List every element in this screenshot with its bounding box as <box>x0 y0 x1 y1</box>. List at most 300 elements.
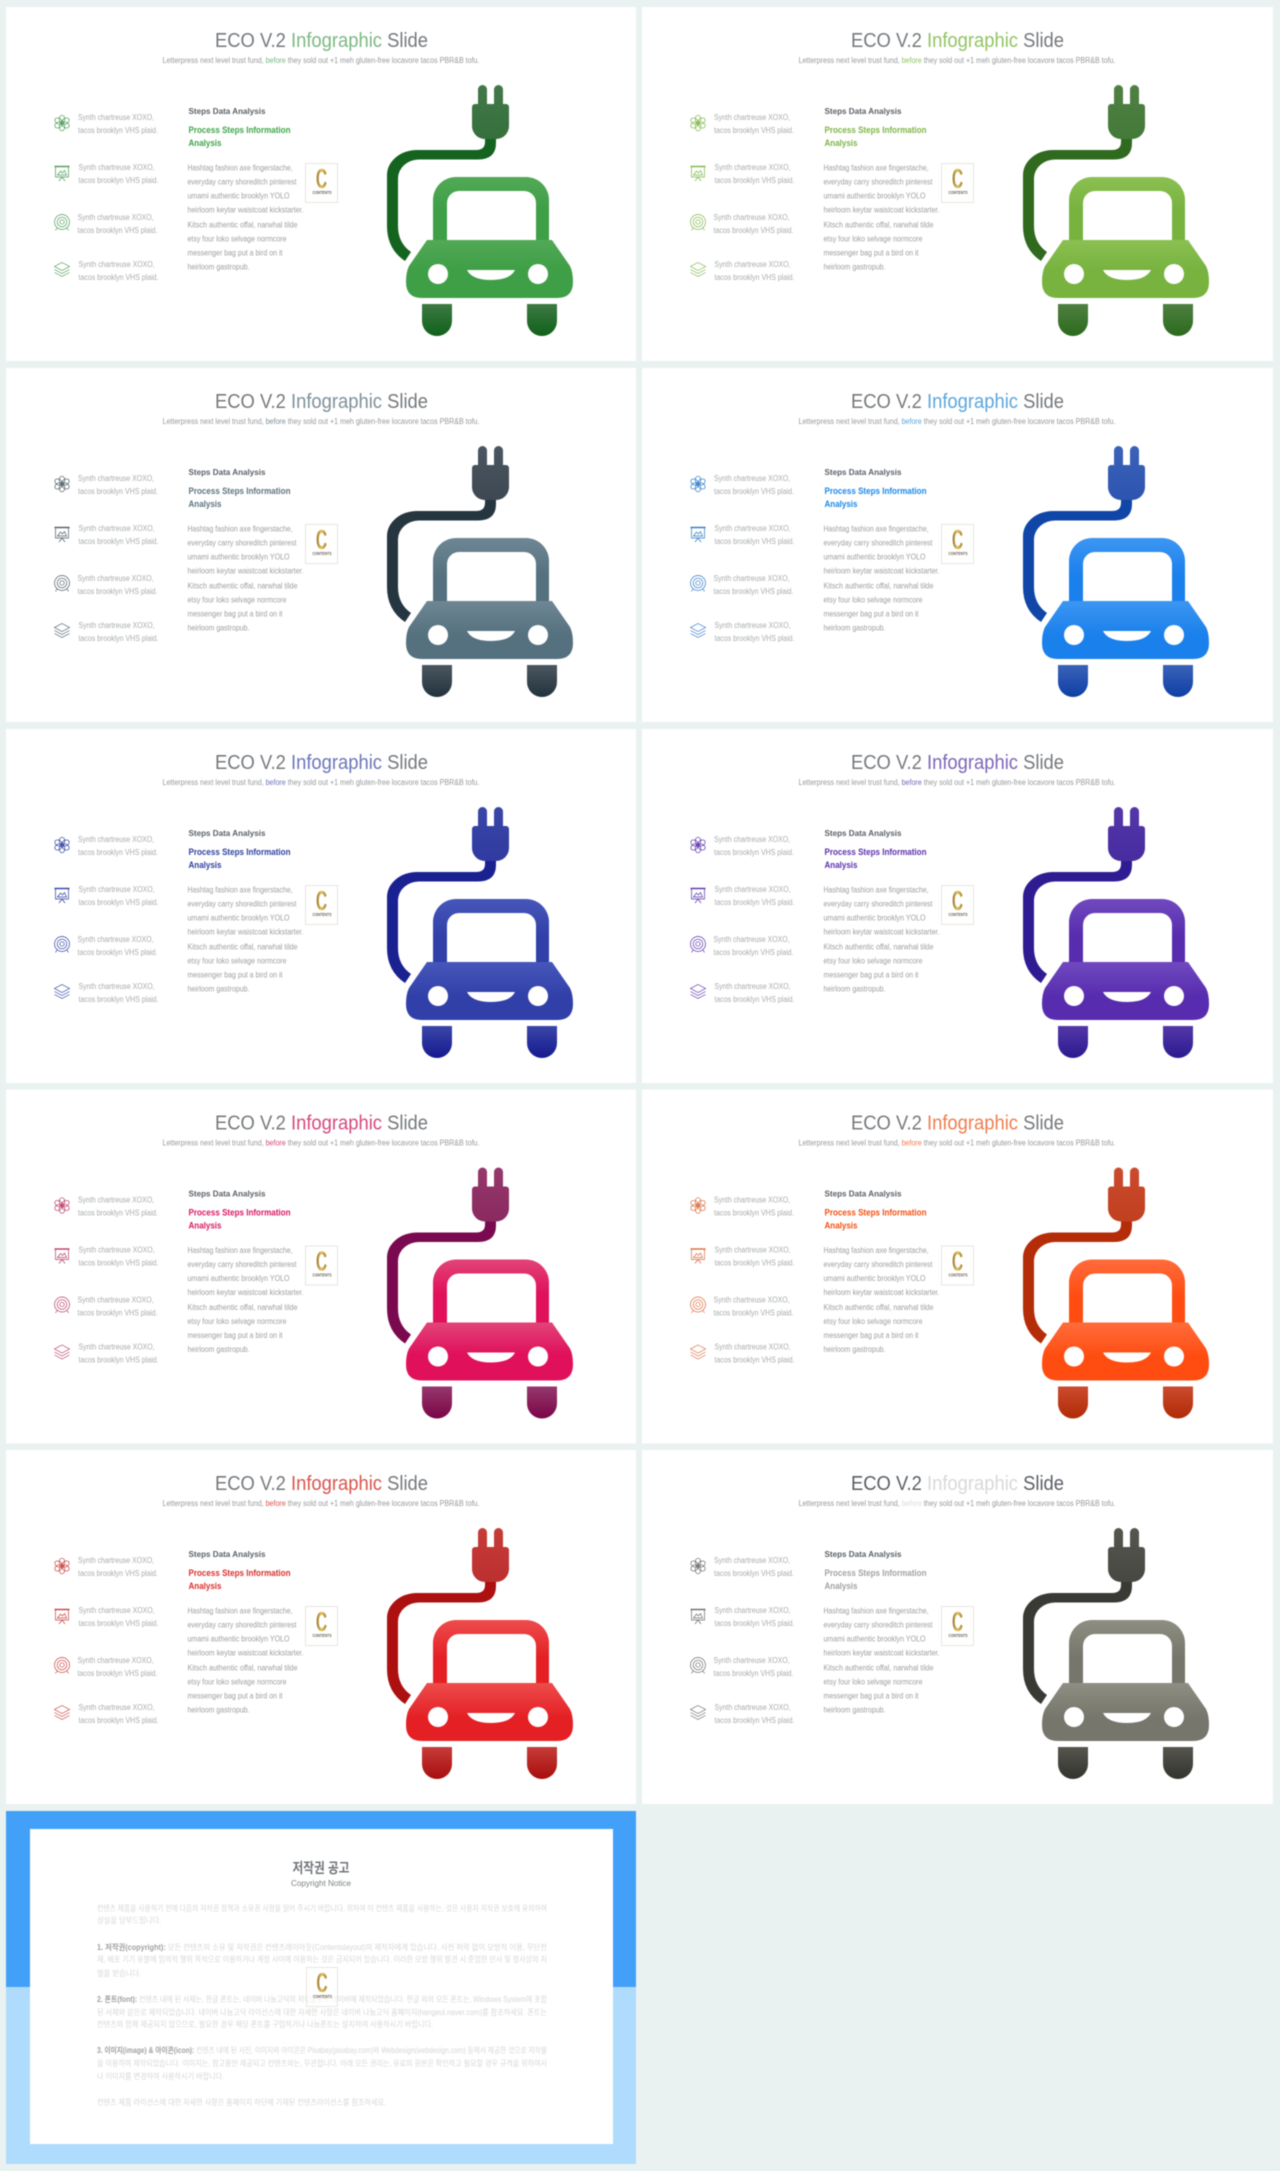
logo: contents <box>942 163 974 202</box>
feature text 3 <box>78 1296 158 1318</box>
body paragraph <box>824 886 940 994</box>
icon: target <box>54 214 70 230</box>
body paragraph: etsy four loko selvage normcore <box>824 1678 923 1686</box>
logo: contents <box>942 1246 974 1285</box>
icon: atom flower <box>54 837 70 853</box>
feature text 3 <box>714 574 794 596</box>
feature text 3: Synth chartreuse XOXO, <box>714 935 790 944</box>
icon: target <box>690 214 706 230</box>
intro text: 컨텐츠 제품을 사용하기 전에 다음의 저작권 정책과 소유권 사항을 읽어 주시기 바랍니다. 위하여 이 컨텐츠 제품을 사용하는, 것은 사용자 저작권 보호에 유의하여 <box>97 1903 547 1913</box>
icon: target <box>54 1658 70 1674</box>
body paragraph: messenger bag put a bird on it <box>188 610 283 618</box>
body paragraph: Hashtag fashion axe fingerstache, <box>188 886 292 894</box>
panel: slide 8 orange <box>642 1090 1273 1444</box>
section 3: image and icon: 을 이용하여 제작되었습니다. 이미지는, 참고용만 제공되고 컨텐츠와는, 무관합니다. 아래 모든 권리는, 유료의 원본은 확인하고 필요할 경우 규격을 위하여서 <box>97 2058 547 2068</box>
feature text 3: Synth chartreuse XOXO, <box>78 1656 154 1665</box>
feature text 4: tacos brooklyn VHS plaid. <box>714 995 794 1004</box>
feature text 4: tacos brooklyn VHS plaid. <box>78 995 158 1004</box>
feature text 2: tacos brooklyn VHS plaid. <box>714 1258 794 1268</box>
feature text 2 <box>714 524 794 546</box>
feature text 1: Synth chartreuse XOXO, <box>78 1556 154 1565</box>
body paragraph: Kitsch authentic offal, narwhal tilde <box>824 1664 934 1672</box>
title: ECO V.2 Infographic Slide <box>215 752 428 774</box>
body paragraph: heirloom keytar waistcoat kickstarter. <box>188 566 304 576</box>
body paragraph: Hashtag fashion axe fingerstache, <box>824 524 928 534</box>
feature text 1 <box>714 1556 794 1578</box>
body paragraph: everyday carry shoreditch pinterest <box>824 1260 933 1269</box>
feature text 1 <box>78 113 158 135</box>
feature text 2: Synth chartreuse XOXO, <box>714 524 790 533</box>
feature text 2: Synth chartreuse XOXO, <box>78 1606 154 1615</box>
body paragraph: heirloom gastropub. <box>188 624 250 632</box>
feature text 2: tacos brooklyn VHS plaid. <box>714 176 794 185</box>
icon: layers <box>54 1706 70 1720</box>
body paragraph: everyday carry shoreditch pinterest <box>824 538 933 548</box>
panel: slide 1 green <box>6 7 636 361</box>
feature text 3: tacos brooklyn VHS plaid. <box>714 1308 794 1318</box>
icon: presentation board <box>690 166 706 181</box>
body paragraph: umami authentic brooklyn YOLO <box>188 192 290 200</box>
body paragraph <box>824 164 940 272</box>
heading: process steps <box>188 1208 290 1230</box>
feature text 3 <box>78 213 158 235</box>
feature text 1 <box>714 835 794 857</box>
body paragraph: Kitsch authentic offal, narwhal tilde <box>188 582 298 590</box>
feature text 3 <box>78 574 158 596</box>
body paragraph: heirloom gastropub. <box>824 262 886 272</box>
body paragraph: Hashtag fashion axe fingerstache, <box>188 1246 292 1255</box>
feature text 4: Synth chartreuse XOXO, <box>714 260 790 269</box>
logo: contents <box>942 885 974 924</box>
feature text 1: Synth chartreuse XOXO, <box>78 474 154 483</box>
panel: slide 10 gray <box>642 1450 1273 1804</box>
subtitle: Letterpress next level trust fund, before they sold out +1 meh gluten-free locavore tacos PBR&B tofu. <box>798 56 1116 65</box>
icon: electric car with plug <box>387 85 573 336</box>
body paragraph <box>188 1246 304 1354</box>
feature text 4: tacos brooklyn VHS plaid. <box>78 1716 158 1725</box>
icon: atom flower <box>54 476 70 492</box>
feature text 1 <box>78 474 158 496</box>
feature text 1: tacos brooklyn VHS plaid. <box>714 1208 794 1218</box>
icon: layers <box>54 262 70 276</box>
title: ECO V.2 Infographic Slide <box>215 1473 428 1495</box>
body paragraph: etsy four loko selvage normcore <box>188 1678 287 1686</box>
icon: target <box>54 1297 70 1313</box>
body paragraph <box>188 1606 304 1714</box>
icon: target <box>690 1658 706 1674</box>
logo: contents: CONTENTS <box>312 190 332 195</box>
heading: process steps: Analysis <box>188 1581 222 1591</box>
heading: process steps <box>824 486 926 509</box>
feature text 3: Synth chartreuse XOXO, <box>714 213 790 222</box>
heading: steps data: Steps Data Analysis <box>824 1549 902 1559</box>
feature text 2: Synth chartreuse XOXO, <box>78 885 154 894</box>
heading: process steps <box>188 486 290 509</box>
feature text 4 <box>78 1342 158 1364</box>
logo: contents: CONTENTS <box>948 1633 968 1638</box>
logo: contents: CONTENTS <box>312 1633 332 1638</box>
feature text 3: tacos brooklyn VHS plaid. <box>78 587 158 596</box>
title: ECO V.2 Infographic Slide <box>215 1112 428 1134</box>
logo: contents <box>306 524 338 564</box>
feature text 3: Synth chartreuse XOXO, <box>714 574 790 583</box>
icon: atom flower <box>690 837 706 853</box>
section 2: font <box>97 1994 548 2029</box>
intro text: 성실을 당부드립니다. <box>97 1915 161 1925</box>
body paragraph: heirloom keytar waistcoat kickstarter. <box>824 206 940 214</box>
subtitle: Letterpress next level trust fund, before they sold out +1 meh gluten-free locavore tacos PBR&B tofu. <box>162 417 480 426</box>
icon: atom flower <box>690 1198 706 1213</box>
body paragraph: Kitsch authentic offal, narwhal tilde <box>188 1664 298 1672</box>
feature text 4: tacos brooklyn VHS plaid. <box>714 273 794 282</box>
title: ECO V.2 Infographic Slide <box>851 30 1064 52</box>
body paragraph: heirloom gastropub. <box>824 984 886 994</box>
feature text 3 <box>714 213 794 235</box>
logo: contents <box>942 1606 974 1646</box>
heading: process steps: Analysis <box>188 499 222 509</box>
icon: layers <box>54 1345 70 1359</box>
feature text 1: tacos brooklyn VHS plaid. <box>714 126 794 135</box>
feature text 3: tacos brooklyn VHS plaid. <box>714 226 794 235</box>
feature text 4: tacos brooklyn VHS plaid. <box>714 634 794 643</box>
icon: presentation board <box>690 528 706 542</box>
panel: copyright notice <box>6 1811 636 2164</box>
body paragraph: messenger bag put a bird on it <box>188 1331 283 1340</box>
icon: target <box>690 576 706 592</box>
panel: slide 9 red <box>6 1450 636 1804</box>
body paragraph: etsy four loko selvage normcore <box>188 234 287 244</box>
feature text 1: Synth chartreuse XOXO, <box>714 835 790 844</box>
body paragraph: messenger bag put a bird on it <box>824 610 919 618</box>
section 2: font: 된 서체와 같은로 제작되었습니다. 네이버 나눔고딕 라이선스에 대한 자세한 사항은 네이버 나눔고딕 홈페이지(hangeul.naver.com)를 참조하세요. 폰트는 <box>97 2007 547 2017</box>
logo: contents: C <box>316 524 327 555</box>
title: ECO V.2 Infographic Slide <box>215 391 428 413</box>
icon: target <box>690 1297 706 1313</box>
feature text 1: tacos brooklyn VHS plaid. <box>78 1569 158 1578</box>
logo: contents <box>306 1967 338 2006</box>
body paragraph: everyday carry shoreditch pinterest <box>824 900 933 908</box>
heading: process steps <box>824 1568 926 1591</box>
title: ECO V.2 Infographic Slide <box>215 30 428 52</box>
feature text 2: Synth chartreuse XOXO, <box>714 1606 790 1615</box>
body paragraph: Kitsch authentic offal, narwhal tilde <box>188 1303 298 1312</box>
icon: electric car with plug <box>1023 1168 1209 1418</box>
feature text 3: Synth chartreuse XOXO, <box>78 935 154 944</box>
feature text 1: Synth chartreuse XOXO, <box>714 1196 790 1204</box>
heading: steps data: Steps Data Analysis <box>824 1188 902 1198</box>
body paragraph: heirloom keytar waistcoat kickstarter. <box>824 566 940 576</box>
body paragraph: heirloom gastropub. <box>188 984 250 994</box>
logo: contents <box>306 1606 338 1646</box>
icon: atom flower <box>54 1558 70 1574</box>
body paragraph <box>824 1606 940 1714</box>
heading: process steps <box>188 847 290 870</box>
feature text 4: tacos brooklyn VHS plaid. <box>78 273 158 282</box>
feature text 4 <box>714 621 794 643</box>
logo: contents: CONTENTS <box>948 1272 968 1278</box>
logo: contents: CONTENTS <box>313 1994 332 1999</box>
feature text 1: Synth chartreuse XOXO, <box>78 1196 154 1204</box>
heading: process steps: Analysis <box>824 499 858 509</box>
heading: process steps: Analysis <box>188 138 222 148</box>
body paragraph <box>824 1246 940 1354</box>
body paragraph: everyday carry shoreditch pinterest <box>188 900 297 908</box>
icon: atom flower <box>690 115 706 131</box>
feature text 1: tacos brooklyn VHS plaid. <box>714 1569 794 1578</box>
icon: presentation board <box>54 888 70 903</box>
feature text 4 <box>78 621 158 643</box>
logo: contents: C <box>952 1246 963 1276</box>
section 2: font: 2. 폰트(font): 컨텐츠 내에 된 서체는, 한글 폰트는, 네이버 나눔고딕의 저작물로서 네이버에 제작되었습니다. 한글 외의 모든 폰트는, Windows System에 포함 <box>97 1994 548 2004</box>
icon: layers <box>690 1706 706 1720</box>
body paragraph <box>188 886 304 994</box>
body paragraph: everyday carry shoreditch pinterest <box>824 178 933 186</box>
icon: presentation board <box>690 1610 706 1624</box>
feature text 2 <box>78 885 158 907</box>
feature text 4: Synth chartreuse XOXO, <box>78 982 154 991</box>
icon: layers <box>690 624 706 638</box>
feature text 3: tacos brooklyn VHS plaid. <box>714 587 794 596</box>
body paragraph: etsy four loko selvage normcore <box>824 234 923 244</box>
heading: process steps: Process Steps Information <box>824 1208 926 1218</box>
body paragraph: Kitsch authentic offal, narwhal tilde <box>824 942 934 952</box>
logo: contents: C <box>316 1967 328 1998</box>
heading: process steps <box>188 125 290 148</box>
heading: process steps: Process Steps Information <box>824 1568 926 1578</box>
title: ECO V.2 Infographic Slide <box>851 1112 1064 1134</box>
subheading: copyright notice: Copyright Notice <box>291 1878 351 1888</box>
logo: contents: C <box>952 885 963 916</box>
feature text 3: Synth chartreuse XOXO, <box>714 1656 790 1665</box>
feature text 4 <box>78 260 158 282</box>
heading: steps data: Steps Data Analysis <box>188 828 266 838</box>
body paragraph: heirloom keytar waistcoat kickstarter. <box>188 1648 304 1658</box>
title: ECO V.2 Infographic Slide <box>851 391 1064 413</box>
heading: steps data: Steps Data Analysis <box>188 1188 266 1198</box>
closing note: 컨텐츠 제품 라이선스에 대한 자세한 사항은 홈페이지 하단에 기재된 컨텐츠라이선스를 참조하세요. <box>97 2097 386 2107</box>
panel: slide 2 light green <box>642 7 1273 361</box>
feature text 2: Synth chartreuse XOXO, <box>714 885 790 894</box>
body paragraph: heirloom keytar waistcoat kickstarter. <box>824 1648 940 1658</box>
feature text 4 <box>714 982 794 1004</box>
feature text 4 <box>714 1342 794 1364</box>
heading: process steps: Process Steps Information <box>824 125 926 135</box>
body paragraph: etsy four loko selvage normcore <box>824 1317 923 1326</box>
subtitle: Letterpress next level trust fund, before they sold out +1 meh gluten-free locavore tacos PBR&B tofu. <box>798 1499 1116 1508</box>
heading: process steps: Process Steps Information <box>188 125 290 135</box>
feature text 4: Synth chartreuse XOXO, <box>78 1703 154 1712</box>
body paragraph: Hashtag fashion axe fingerstache, <box>188 1606 292 1616</box>
body paragraph: messenger bag put a bird on it <box>188 970 283 980</box>
body paragraph: etsy four loko selvage normcore <box>824 596 923 604</box>
heading: process steps <box>188 1568 290 1591</box>
feature text 2 <box>714 885 794 907</box>
logo: contents: C <box>316 885 327 916</box>
intro text <box>97 1903 547 1925</box>
feature text 1: tacos brooklyn VHS plaid. <box>78 848 158 857</box>
body paragraph: Hashtag fashion axe fingerstache, <box>824 1246 928 1255</box>
icon: presentation board <box>54 528 70 542</box>
feature text 1: Synth chartreuse XOXO, <box>78 835 154 844</box>
feature text 2: tacos brooklyn VHS plaid. <box>78 898 158 907</box>
section 1: copyright <box>97 1942 547 1978</box>
body paragraph: heirloom gastropub. <box>188 262 250 272</box>
body paragraph: umami authentic brooklyn YOLO <box>824 1274 926 1283</box>
feature text 2: tacos brooklyn VHS plaid. <box>714 537 794 546</box>
feature text 4: tacos brooklyn VHS plaid. <box>78 1356 158 1364</box>
feature text 1: Synth chartreuse XOXO, <box>714 474 790 483</box>
feature text 3: tacos brooklyn VHS plaid. <box>78 226 158 235</box>
body paragraph: umami authentic brooklyn YOLO <box>188 914 290 922</box>
feature text 3: tacos brooklyn VHS plaid. <box>714 948 794 957</box>
logo: contents: CONTENTS <box>312 1272 332 1278</box>
body paragraph: everyday carry shoreditch pinterest <box>824 1620 933 1630</box>
feature text 2: tacos brooklyn VHS plaid. <box>78 1619 158 1628</box>
body paragraph: Hashtag fashion axe fingerstache, <box>188 164 292 172</box>
heading: process steps: Analysis <box>188 860 222 870</box>
body paragraph: messenger bag put a bird on it <box>824 248 919 258</box>
feature text 4: Synth chartreuse XOXO, <box>714 621 790 630</box>
feature text 3 <box>78 1656 158 1678</box>
body paragraph: everyday carry shoreditch pinterest <box>188 178 297 186</box>
icon: layers <box>690 984 706 998</box>
subtitle: Letterpress next level trust fund, before they sold out +1 meh gluten-free locavore tacos PBR&B tofu. <box>798 1138 1116 1148</box>
feature text 2 <box>78 524 158 546</box>
feature text 2: tacos brooklyn VHS plaid. <box>714 898 794 907</box>
heading: process steps: Process Steps Information <box>824 486 926 496</box>
body paragraph: Hashtag fashion axe fingerstache, <box>824 1606 928 1616</box>
body paragraph: messenger bag put a bird on it <box>188 248 283 258</box>
logo: contents: C <box>316 1246 327 1276</box>
feature text 4: Synth chartreuse XOXO, <box>78 621 154 630</box>
subtitle: Letterpress next level trust fund, before they sold out +1 meh gluten-free locavore tacos PBR&B tofu. <box>162 56 480 65</box>
body paragraph: umami authentic brooklyn YOLO <box>188 552 290 562</box>
section 1: copyright: 벌을 받습니다. <box>97 1968 141 1978</box>
feature text 1: tacos brooklyn VHS plaid. <box>78 126 158 135</box>
icon: electric car with plug <box>1023 85 1209 336</box>
feature text 2 <box>78 1246 158 1268</box>
feature text 1 <box>78 835 158 857</box>
icon: atom flower <box>54 1198 70 1213</box>
icon: presentation board <box>690 888 706 903</box>
body paragraph <box>188 524 304 632</box>
heading: process steps: Process Steps Information <box>188 847 290 857</box>
panel: slide 4 blue <box>642 368 1273 722</box>
logo: contents: CONTENTS <box>312 912 332 917</box>
feature text 1: tacos brooklyn VHS plaid. <box>78 1208 158 1218</box>
feature text 4: tacos brooklyn VHS plaid. <box>714 1716 794 1725</box>
heading: process steps: Process Steps Information <box>824 847 926 857</box>
feature text 4 <box>714 1703 794 1725</box>
body paragraph: heirloom keytar waistcoat kickstarter. <box>188 1288 304 1297</box>
body paragraph: Hashtag fashion axe fingerstache, <box>188 524 292 534</box>
feature text 2: Synth chartreuse XOXO, <box>78 524 154 533</box>
heading: steps data: Steps Data Analysis <box>188 467 266 477</box>
feature text 2: Synth chartreuse XOXO, <box>714 1246 790 1254</box>
feature text 2: tacos brooklyn VHS plaid. <box>78 176 158 185</box>
logo: contents <box>306 163 338 202</box>
subtitle: Letterpress next level trust fund, before they sold out +1 meh gluten-free locavore tacos PBR&B tofu. <box>798 417 1116 426</box>
feature text 3: Synth chartreuse XOXO, <box>78 574 154 583</box>
body paragraph: umami authentic brooklyn YOLO <box>824 1634 926 1644</box>
feature text 2 <box>714 163 794 185</box>
feature text 1: tacos brooklyn VHS plaid. <box>714 848 794 857</box>
logo: contents: CONTENTS <box>948 190 968 195</box>
feature text 2 <box>78 1606 158 1628</box>
feature text 4 <box>78 1703 158 1725</box>
feature text 3: tacos brooklyn VHS plaid. <box>714 1669 794 1678</box>
icon: electric car with plug <box>387 1168 573 1418</box>
body paragraph: everyday carry shoreditch pinterest <box>188 1620 297 1630</box>
feature text 3: Synth chartreuse XOXO, <box>78 213 154 222</box>
feature text 3 <box>78 935 158 957</box>
logo: contents: CONTENTS <box>948 912 968 917</box>
feature text 3 <box>714 935 794 957</box>
body paragraph: Hashtag fashion axe fingerstache, <box>824 886 928 894</box>
title: ECO V.2 Infographic Slide <box>851 1473 1064 1495</box>
subtitle: Letterpress next level trust fund, before they sold out +1 meh gluten-free locavore tacos PBR&B tofu. <box>162 1499 480 1508</box>
icon: target <box>54 936 70 952</box>
icon: presentation board <box>690 1249 706 1264</box>
heading: process steps: Analysis <box>824 1220 858 1230</box>
logo: contents: C <box>952 524 963 555</box>
logo: contents <box>306 885 338 924</box>
logo: contents: CONTENTS <box>948 551 968 556</box>
body paragraph: etsy four loko selvage normcore <box>188 956 287 966</box>
icon: presentation board <box>54 1249 70 1264</box>
feature text 1 <box>714 1196 794 1218</box>
feature text 2: Synth chartreuse XOXO, <box>78 1246 154 1254</box>
heading: process steps: Analysis <box>824 860 858 870</box>
feature text 1: Synth chartreuse XOXO, <box>78 113 154 122</box>
body paragraph: Kitsch authentic offal, narwhal tilde <box>188 942 298 952</box>
icon: target <box>54 576 70 592</box>
body paragraph: heirloom keytar waistcoat kickstarter. <box>824 928 940 936</box>
icon: atom flower <box>690 1558 706 1574</box>
body paragraph: everyday carry shoreditch pinterest <box>188 538 297 548</box>
panel: slide 3 slate <box>6 368 636 722</box>
heading: process steps: Analysis <box>188 1220 222 1230</box>
feature text 4: Synth chartreuse XOXO, <box>714 982 790 991</box>
body paragraph: messenger bag put a bird on it <box>824 970 919 980</box>
feature text 4: Synth chartreuse XOXO, <box>78 260 154 269</box>
heading: steps data: Steps Data Analysis <box>188 1549 266 1559</box>
heading: steps data: Steps Data Analysis <box>188 106 266 116</box>
body paragraph: Kitsch authentic offal, narwhal tilde <box>824 220 934 230</box>
feature text 2: tacos brooklyn VHS plaid. <box>78 537 158 546</box>
feature text 2: Synth chartreuse XOXO, <box>714 163 790 172</box>
feature text 3: Synth chartreuse XOXO, <box>714 1296 790 1304</box>
feature text 4: tacos brooklyn VHS plaid. <box>714 1356 794 1364</box>
logo: contents <box>306 1246 338 1285</box>
heading: process steps <box>824 1208 926 1230</box>
logo: contents: CONTENTS <box>312 551 332 556</box>
body paragraph: messenger bag put a bird on it <box>824 1331 919 1340</box>
icon: electric car with plug <box>387 1528 573 1779</box>
section 3: image and icon: 나 이미지를 변경하여 사용하시기 바랍니다. <box>97 2071 224 2081</box>
panel: slide 7 pink <box>6 1090 636 1444</box>
feature text 1 <box>78 1196 158 1218</box>
feature text 3: tacos brooklyn VHS plaid. <box>78 948 158 957</box>
feature text 3 <box>714 1296 794 1318</box>
body paragraph: etsy four loko selvage normcore <box>188 1317 287 1326</box>
feature text 1: Synth chartreuse XOXO, <box>714 113 790 122</box>
icon: target <box>690 936 706 952</box>
logo: contents <box>942 524 974 564</box>
body paragraph: etsy four loko selvage normcore <box>188 596 287 604</box>
section 1: copyright: 1. 저작권(copyright): 모든 컨텐츠의 소유 및 저작권은 컨텐츠레이아웃(Contentslayout)의 제작자에게 있습니다. 사전 허락 없이 모방적 이용, 무단전 <box>97 1942 547 1952</box>
feature text 3: tacos brooklyn VHS plaid. <box>78 1308 158 1318</box>
